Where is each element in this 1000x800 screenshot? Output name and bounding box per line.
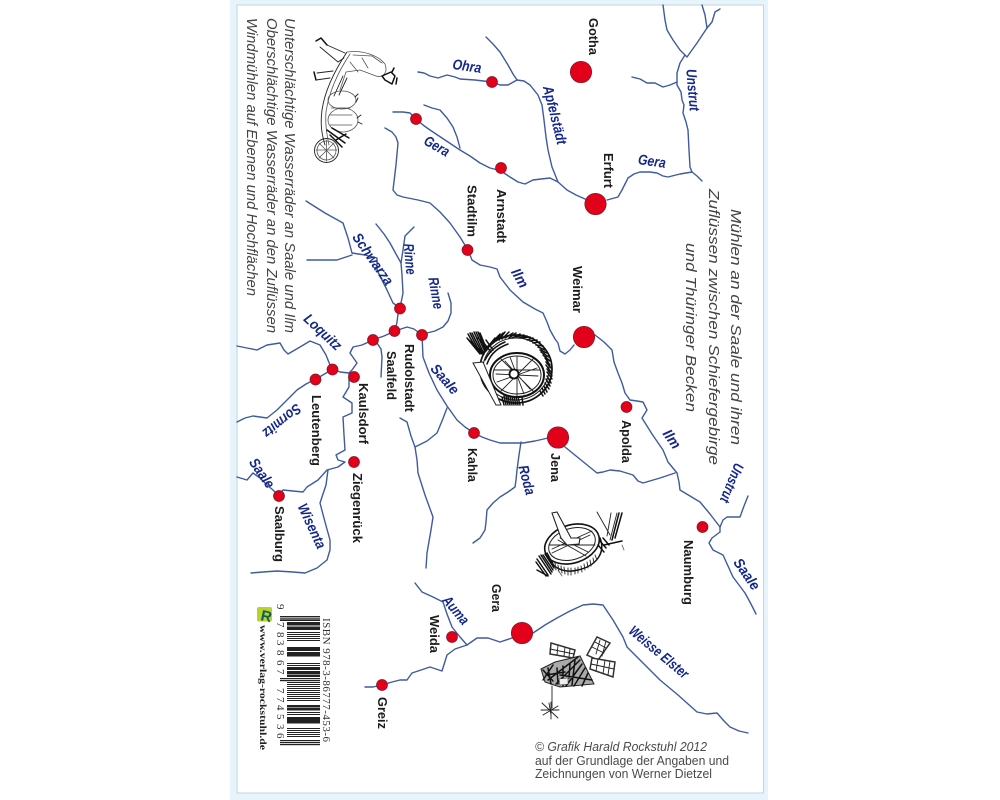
barcode digits: 5: [274, 714, 286, 720]
barcode digits: [274, 604, 286, 739]
river label: Ohra: Ohra: [451, 57, 482, 77]
river: Saalfeld tributary: [377, 343, 382, 377]
river label: Saale right: Saale: [730, 556, 763, 593]
mill pole and star: [541, 686, 559, 719]
river label: Schwarza: Schwarza: [348, 230, 396, 289]
river label: Gera right: Gera: [637, 152, 667, 172]
barcode digits: 9: [274, 604, 286, 610]
barcode digits: 6: [274, 733, 286, 739]
river: Gera to Unstrut: [607, 172, 702, 200]
label: Weimar: Weimar: [570, 266, 585, 313]
marker: Rudolstadt: [389, 326, 400, 336]
river label: Roda: Roda: [514, 464, 538, 497]
sail: upper left: [550, 643, 575, 658]
label: Gera: Gera: [489, 584, 504, 613]
barcode bars: [280, 616, 320, 745]
rivers: [237, 5, 756, 733]
legend line: windmills: Windmühlen auf Ebenen und Hochflächen: [243, 18, 260, 296]
title line 1: Mühlen an der Saale und ihren: [727, 209, 744, 445]
river: Loquitz: [237, 341, 330, 365]
marker: Greiz: [376, 680, 388, 690]
river: Saale link: [333, 369, 349, 373]
river: Saale east of Jena: [565, 447, 675, 483]
river: Gera upper: [393, 112, 558, 184]
credit text: [535, 740, 729, 781]
barcode digits: 4: [274, 705, 286, 711]
label: Rudolstadt: Rudolstadt: [402, 344, 417, 413]
river: Saale upper: [237, 327, 422, 496]
river: Wisenta: [251, 470, 330, 573]
marker: Rudolstadt east: [416, 330, 428, 340]
river: Ohra: [418, 72, 517, 85]
river: Saale north: [709, 527, 756, 614]
publisher URL: www.verlag-rockstuhl.de: [257, 625, 267, 750]
label: Kahla: Kahla: [465, 448, 480, 483]
river labels: [245, 57, 763, 683]
legend line: undershot wheels: Unterschlächtige Wasserräder an Saale und Ilm: [281, 18, 298, 333]
label: Apolda: Apolda: [619, 420, 634, 464]
credit line 2: auf der Grundlage der Angaben und: [535, 754, 729, 768]
marker: Jena: [547, 427, 569, 448]
river: Rinne link: [395, 314, 398, 331]
river label: Wisenta: Wisenta: [294, 501, 328, 552]
barcode digits: 7: [274, 688, 286, 694]
barcode digits: 3: [274, 640, 286, 646]
label: Erfurt: Erfurt: [601, 153, 616, 189]
title line 2: Zuflüssen zwischen Schiefergebirge: [705, 188, 722, 465]
river: Unstrut lower: [720, 496, 748, 527]
marker: Arnstadt: [496, 162, 506, 174]
river: Unstrut: [663, 5, 692, 172]
river: southern Saale tributary: [400, 418, 433, 568]
river: Schwarza side branch: [307, 255, 352, 260]
river label: Unstrut lower: Unstrut: [716, 461, 746, 505]
river: Ilm upper: [385, 128, 574, 354]
city labels: [272, 18, 696, 729]
river: Apfelstädt: [517, 80, 585, 199]
river label: Rinne upper: Rinne: [400, 243, 418, 275]
river label: Ilm upper: Ilm: [507, 266, 531, 291]
icon: undershot water wheel: [467, 332, 552, 405]
marker: Apolda: [621, 402, 632, 412]
barcode digits: 7: [274, 669, 286, 675]
marker: Leutenberg: [310, 374, 321, 385]
label: Weida: Weida: [427, 615, 442, 654]
marker: Kaulsdorf: [348, 372, 360, 382]
river: Roda: [473, 442, 521, 543]
label: Greiz: Greiz: [375, 697, 390, 729]
river label: Unstrut upper: Unstrut: [682, 68, 702, 113]
river: Ohra tributary: [486, 37, 517, 80]
barcode digits: 7: [274, 622, 286, 628]
marker: upper Gera town: [410, 114, 422, 124]
legend line: overshot wheels: Oberschlächtige Wasserräder an den Zuflüssen: [263, 18, 280, 333]
barcode digits: 8: [274, 632, 286, 638]
river: Gera tributary: [424, 105, 460, 148]
barcode digits: 7: [274, 697, 286, 703]
river: Weisse Elster east: [533, 604, 748, 733]
label: Saalburg: Saalburg: [272, 506, 287, 562]
label: Ziegenrück: Ziegenrück: [350, 473, 365, 544]
barcode digits: 8: [274, 650, 286, 656]
river label: Loquitz: Loquitz: [300, 311, 345, 355]
river: Unstrut top branch: [707, 9, 720, 28]
marker: Naumburg: [697, 522, 708, 532]
icon: windmill: [541, 637, 615, 719]
marker: Weida: [446, 632, 458, 642]
river: Auma: [415, 583, 467, 645]
mill body: [541, 656, 594, 687]
barcode digits: 6: [274, 660, 286, 666]
marker: Weimar: [573, 326, 595, 348]
river label: Auma: Auma: [438, 592, 472, 628]
river: Rinne upper: [400, 227, 414, 308]
label: Arnstadt: Arnstadt: [494, 189, 509, 244]
marker: Kahla: [468, 428, 480, 438]
river label: Apfelstädt: Apfelstädt: [539, 83, 569, 147]
label: Kaulsdorf: Kaulsdorf: [356, 383, 371, 445]
sail: upper right: [587, 637, 610, 660]
label: Saalfeld: Saalfeld: [384, 351, 399, 400]
marker: Saalfeld: [368, 334, 378, 346]
river label: Gera upper: Gera: [421, 133, 452, 161]
credit line 1: © Grafik Harald Rockstuhl 2012: [535, 740, 707, 754]
credit line 3: Zeichnungen von Werner Dietzel: [535, 767, 712, 781]
river label: Rinne lower: Rinne: [424, 276, 446, 310]
barcode block: [274, 604, 332, 745]
river: Saale at Jena: [474, 433, 548, 443]
river: Rinne lower: [427, 293, 451, 333]
marker: Gera: [511, 622, 533, 644]
river: Sormitz: [237, 369, 333, 422]
river: Orla tributary: [415, 408, 447, 447]
title line 3: und Thüringer Becken: [682, 243, 699, 412]
marker: upper Saale town: [394, 303, 406, 314]
river label: Saale middle: Saale: [427, 361, 462, 398]
panel: map card: [237, 5, 764, 793]
marker: Loquitz town: [327, 364, 338, 375]
river label: Ilm lower: Ilm: [659, 427, 684, 452]
river label: Weisse Elster: Weisse Elster: [625, 623, 692, 683]
river: Weisse Elster west: [365, 638, 512, 687]
river label: Saale lower: Saale: [245, 455, 277, 492]
river: Schwarza: [306, 201, 400, 308]
sail: lower right: [590, 658, 615, 677]
label: Leutenberg: Leutenberg: [309, 395, 324, 466]
river: Saale middle: [422, 335, 474, 433]
label: Jena: Jena: [548, 453, 563, 483]
icon: overshot water wheel: [536, 512, 624, 576]
marker: Saalburg: [274, 490, 284, 502]
label: Stadtilm: Stadtilm: [464, 185, 480, 237]
river label: Sormitz: Sormitz: [258, 400, 304, 441]
marker: Ziegenrück: [348, 456, 360, 468]
barcode digits: 3: [274, 724, 286, 730]
marker: Gotha: [570, 61, 592, 83]
icon: man with wheelbarrow: [314, 38, 397, 162]
label: Gotha: Gotha: [586, 18, 601, 56]
river: Unstrut side branch: [632, 77, 677, 87]
ISBN text: ISBN 978-3-86777-453-6: [320, 618, 332, 742]
marker: Erfurt: [585, 193, 606, 215]
river: Unstrut upper branches: [685, 5, 707, 57]
label: Naumburg: Naumburg: [681, 540, 696, 605]
river: Rinne branch: [376, 224, 401, 263]
title: [682, 188, 744, 465]
publisher logo: R: [259, 607, 273, 626]
city markers: [274, 61, 708, 691]
legend text: mill types: [243, 18, 298, 333]
marker: Ohra town: [486, 76, 498, 88]
marker: Stadtilm: [462, 244, 473, 256]
river: Ilm lower: [595, 335, 720, 527]
